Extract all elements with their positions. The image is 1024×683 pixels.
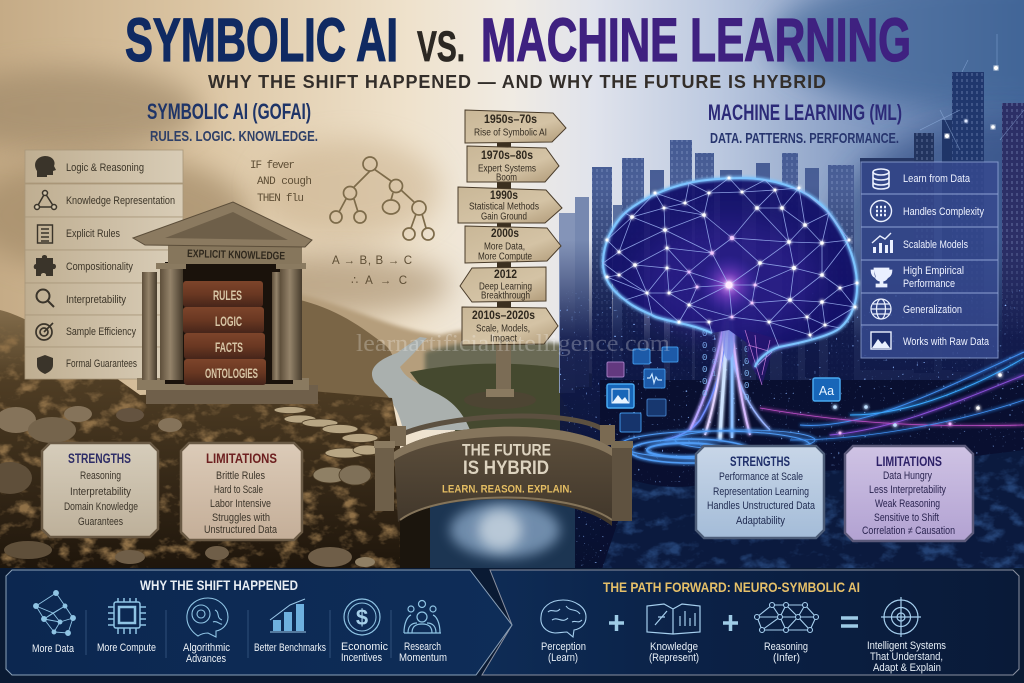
binary data columns: 0 (702, 389, 707, 399)
binary data columns: 0 (744, 381, 749, 391)
label: reasoning: (Infer) (773, 652, 800, 664)
label: algorithmic advances: Algorithmic (183, 642, 230, 654)
heading: symbolic AI (147, 99, 318, 145)
logic formula text: ∴ A → C (351, 275, 407, 287)
label: intelligent systems: Adapt & Explain (873, 662, 941, 674)
right side: city skyline (559, 34, 1024, 575)
flowing data streams (760, 352, 1024, 440)
icon: data network (34, 590, 76, 636)
panel: machine learning limitations: Weak Reasoning (875, 498, 940, 510)
panel: symbolic limitations: Unstructured Data (204, 524, 278, 536)
panel: machine learning limitations (845, 446, 973, 541)
label: scalable models: Scalable Models (903, 239, 968, 251)
binary data columns: 0 (744, 345, 749, 355)
binary data columns: 0 (744, 393, 749, 403)
sign: 2010s-2020s: Scale, Models, (476, 324, 530, 334)
sign: 1970s-80s (467, 146, 559, 184)
label: formal guarantees: Formal Guarantees (66, 358, 137, 370)
sign: 1950s-70s (465, 110, 566, 143)
hybrid message: IS HYBRID (463, 458, 549, 479)
heading: path forward: THE PATH FORWARD: NEURO-SYMBOLIC AI (603, 579, 860, 595)
label: algorithmic advances (183, 642, 230, 665)
panel: symbolic limitations: Struggles with (212, 512, 270, 524)
icon: magnifier (36, 290, 54, 307)
temple: explicit knowledge (133, 202, 318, 404)
binary data columns: 0 (744, 357, 749, 367)
formal rule text: IF fever (250, 160, 295, 172)
title: VS. (417, 23, 465, 71)
icon: people (404, 600, 441, 633)
book stack: LOGIC (215, 313, 242, 329)
label: economic incentives: Economic (341, 641, 388, 653)
binary data columns: 0 (702, 341, 707, 351)
label: reasoning (764, 641, 808, 664)
icon: dollar coin: $ (356, 605, 368, 630)
panel: symbolic strengths: Interpretability (70, 486, 131, 498)
title: SYMBOLIC AI (125, 6, 398, 74)
binary data columns: 0 (702, 365, 707, 375)
panel: machine learning limitations: Data Hungry (883, 470, 932, 482)
label: knowledge representation: Knowledge Representation (66, 195, 175, 207)
label: knowledge: Knowledge (650, 641, 698, 653)
equals sign (841, 618, 858, 626)
sign: 2000s: 2000s (491, 226, 519, 240)
panel: symbolic limitations (181, 443, 302, 540)
sign: 1970s-80s: 1970s–80s (481, 148, 533, 162)
label: more data: More Data (32, 643, 75, 655)
label: perception (541, 641, 586, 664)
label: explicit rules: Explicit Rules (66, 228, 120, 240)
hybrid message: LEARN. REASON. EXPLAIN. (442, 484, 572, 496)
node dots (34, 190, 56, 210)
sign: 2012: Breakthrough (481, 290, 530, 302)
label: interpretability: Interpretability (66, 294, 126, 306)
panel: symbolic limitations: Brittle Rules (216, 470, 265, 482)
label: high empirical performance (903, 265, 964, 290)
panel: machine learning features (861, 162, 998, 358)
panel: symbolic limitations: Hard to Scale (214, 484, 263, 496)
icon: globe (871, 299, 891, 319)
label: research momentum (399, 641, 447, 664)
label: economic incentives (341, 641, 388, 664)
binary data columns (702, 329, 749, 403)
panel: machine learning strengths: Performance at Scale (719, 471, 803, 483)
binary data columns: 1 (712, 371, 716, 379)
icon: head with brain (35, 156, 56, 177)
icon: database (873, 169, 889, 189)
right: glowing brain stem (665, 285, 770, 440)
label: generalization: Generalization (903, 304, 962, 316)
panel: why the shift happened (6, 570, 512, 675)
icon: grid circle (870, 200, 892, 222)
label: knowledge (649, 641, 699, 664)
label: better benchmarks: Better Benchmarks (254, 642, 326, 654)
icon: reasoning network (754, 602, 818, 632)
panel: symbolic strengths: STRENGTHS (68, 451, 131, 466)
sign: 1990s (458, 187, 562, 223)
label: research momentum: Research (404, 641, 441, 653)
label: perception: Perception (541, 641, 586, 653)
book stack: ONTOLOGIES (205, 365, 258, 381)
hybrid message: THE FUTURE (462, 440, 551, 460)
binary data columns: 0 (702, 377, 707, 387)
label: handles complexity: Handles Complexity (903, 206, 984, 218)
binary data columns: 0 (744, 369, 749, 379)
sign: 1950s-70s: 1950s–70s (484, 112, 537, 126)
panel: machine learning limitations: Less Interpretability (869, 484, 946, 496)
sign: 2000s: More Data, (484, 242, 525, 252)
label: compositionality: Compositionality (66, 261, 133, 273)
label: more compute: More Compute (97, 642, 156, 654)
plus sign (609, 615, 624, 631)
label: economic incentives: Incentives (341, 652, 382, 664)
heading: symbolic AI: SYMBOLIC AI (GOFAI) (147, 99, 311, 124)
sign: 1970s-80s: Expert Systems (478, 164, 536, 174)
panel: symbolic limitations: Labor Intensive (210, 498, 271, 510)
label: algorithmic advances: Advances (186, 653, 226, 665)
book stack: RULES (213, 287, 242, 303)
heading: machine learning: DATA. PATTERNS. PERFORMANCE. (710, 130, 899, 147)
icon: chip (108, 598, 146, 634)
label: research momentum: Momentum (399, 652, 447, 664)
icon: picture (871, 332, 891, 349)
label: knowledge: (Represent) (649, 652, 699, 664)
right side: dark ground and sparkles (560, 290, 1024, 575)
label: intelligent systems: That Understand, (870, 651, 943, 663)
bridge: the future is hybrid (374, 416, 633, 526)
temple: explicit knowledge: EXPLICIT KNOWLEDGE (187, 248, 285, 263)
floating data icons (607, 347, 840, 432)
panel: symbolic strengths (42, 443, 158, 537)
panel: path forward (482, 570, 1019, 675)
formal rule text: AND cough (257, 176, 312, 188)
panel: machine learning limitations: Correlation ≠ Causation (862, 525, 955, 537)
binary data columns: 0 (712, 347, 716, 355)
hybrid message (442, 440, 572, 496)
panel: machine learning strengths: STRENGTHS (730, 454, 790, 469)
landscape: distant sepia hills (280, 290, 640, 575)
sign: 2010s-2020s: Impact (490, 334, 517, 344)
sign: 2000s: More Compute (478, 252, 532, 262)
label: works with raw data: Works with Raw Data (903, 336, 990, 348)
label: perception: (Learn) (548, 652, 578, 664)
icon: benchmark bars (270, 599, 306, 632)
formal rule text: THEN flu (257, 193, 304, 205)
icon: trophy (871, 268, 892, 287)
plus sign (723, 615, 738, 631)
sign: 2012: 2012 (494, 267, 517, 281)
heading: shift: WHY THE SHIFT HAPPENED (140, 577, 298, 593)
binary data columns: 1 (712, 335, 716, 343)
label: high empirical performance: Performance (903, 278, 955, 290)
panel: machine learning strengths (696, 446, 824, 538)
label: high empirical performance: High Empirical (903, 265, 964, 277)
brain network (603, 176, 858, 385)
network lines (603, 178, 857, 347)
icon: open book (647, 604, 700, 634)
subtitle: WHY THE SHIFT HAPPENED — AND WHY THE FUTURE IS HYBRID (208, 72, 826, 92)
left side: rocky ground (0, 300, 400, 580)
sign: 1990s: Statistical Methods (469, 202, 539, 212)
sign: 2010s-2020s: 2010s–2020s (472, 308, 535, 322)
sign: 2012: Deep Learning (479, 282, 532, 292)
heading: machine learning: MACHINE LEARNING (ML) (708, 100, 902, 125)
icon: puzzle piece (34, 255, 56, 276)
logic tree diagram (330, 157, 434, 240)
panel: symbolic strengths: Domain Knowledge (64, 501, 138, 513)
sign: 1990s: Gain Ground (481, 212, 527, 222)
title (125, 6, 911, 74)
river (372, 337, 470, 430)
panel: machine learning strengths: Handles Unstructured Data (707, 500, 816, 512)
icon: rule list (38, 225, 52, 243)
logic formula text (332, 255, 412, 287)
watermark: learnartificialintelligence.com (356, 331, 670, 357)
label: reasoning: Reasoning (764, 641, 808, 653)
panel: machine learning limitations: Sensitive to Shift (874, 512, 939, 524)
label: sample efficiency: Sample Efficiency (66, 326, 136, 338)
sign: 1970s-80s: Boom (496, 172, 517, 184)
binary data columns: 0 (702, 329, 707, 339)
icon: dollar coin (344, 599, 380, 635)
stone path (274, 406, 381, 485)
panel: machine learning strengths: Representation Learning (713, 486, 809, 498)
panel: symbolic limitations: LIMITATIONS (206, 451, 277, 466)
binary data columns: 0 (712, 359, 716, 367)
panel: symbolic AI features (25, 150, 183, 379)
panel: symbolic strengths: Reasoning (80, 470, 121, 482)
heading: symbolic AI: RULES. LOGIC. KNOWLEDGE. (150, 128, 318, 145)
formal rule text (250, 160, 312, 205)
sign: 1990s: 1990s (490, 188, 518, 202)
book stack (183, 281, 266, 385)
panel: symbolic strengths: Guarantees (78, 516, 123, 528)
sign: 2000s (465, 226, 561, 263)
floating data icons: Aa (819, 384, 834, 398)
icon: target systems (881, 597, 921, 637)
book stack: FACTS (215, 339, 243, 355)
timeline signpost (458, 110, 566, 409)
sign: 2010s-2020s (462, 307, 558, 345)
bottom band (0, 568, 1024, 683)
sign: 1950s-70s: Rise of Symbolic AI (474, 128, 547, 138)
icon: gear head (187, 598, 228, 637)
panel: machine learning strengths: Adaptability (736, 515, 785, 527)
icon: knowledge graph (37, 193, 54, 207)
label: learn from data: Learn from Data (903, 173, 971, 185)
label: intelligent systems: Intelligent Systems (867, 640, 946, 652)
logic formula text: A → B, B → C (332, 255, 412, 267)
heading: machine learning (708, 100, 902, 147)
icon: target (36, 323, 53, 340)
network nodes (606, 176, 858, 336)
binary data columns: 0 (702, 353, 707, 363)
label: logic and reasoning: Logic & Reasoning (66, 162, 144, 174)
label: intelligent systems (867, 640, 946, 674)
icon: shield (37, 355, 53, 374)
water under bridge (430, 495, 575, 570)
icon: brain perception (541, 600, 586, 637)
sign: 2012 (460, 267, 546, 302)
panel: machine learning limitations: LIMITATIONS (876, 454, 942, 469)
icon: growth chart (872, 233, 893, 253)
swirl at the base of the stem (620, 430, 815, 463)
